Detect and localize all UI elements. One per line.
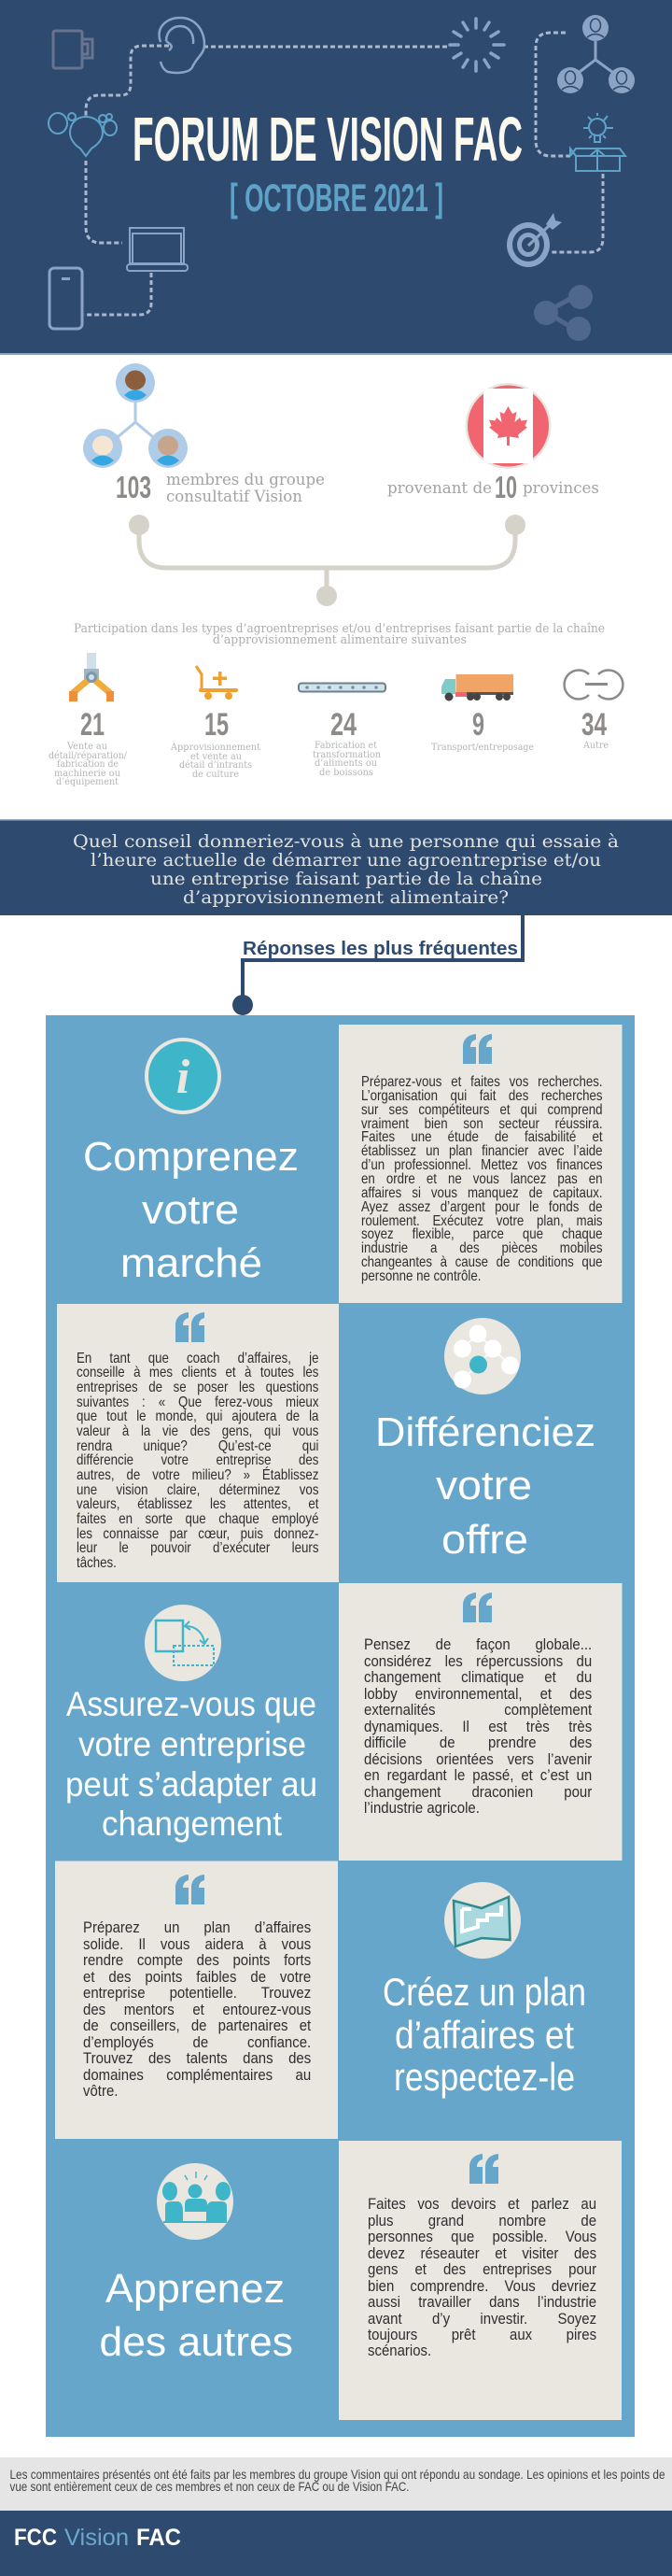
heading: marché	[120, 1240, 262, 1286]
icon: ear	[160, 18, 204, 73]
quote text: plus grand nombre de	[368, 2212, 596, 2229]
quote card	[339, 2141, 622, 2420]
quote text: vôtre.	[83, 2082, 118, 2100]
quote text: dynamiques. Il est très très	[364, 1718, 592, 1735]
icon: conveyor	[299, 684, 385, 691]
quote text: considérez les répercussions du	[364, 1652, 592, 1670]
quote text: entreprise potentielle. Trouvez	[83, 1984, 311, 2002]
icon: info	[147, 1040, 219, 1112]
heading: Apprenez	[105, 2266, 285, 2312]
quote text: avant d’y investir. Soyez	[368, 2310, 596, 2328]
icon: quote mark	[175, 1312, 204, 1342]
quote text	[364, 1636, 623, 1823]
category: machinery	[49, 653, 128, 787]
heading	[83, 1134, 299, 1286]
label: détail d’intrants	[179, 760, 252, 771]
provinces label: provenant de	[387, 479, 492, 498]
quote text: rendre compte des points forts	[83, 1951, 311, 1969]
quote text: externalités complètement	[364, 1701, 592, 1719]
quote text: scénarios.	[368, 2342, 431, 2359]
label: détail/réparation/	[49, 751, 128, 761]
icon: quote mark	[175, 1875, 204, 1904]
dashed connector paths	[84, 33, 603, 315]
quote text: toujours prêt aux pires	[368, 2326, 596, 2343]
question text: Quel conseil donneriez-vous à une personne qui essaie à	[73, 831, 619, 852]
quote text: conseille à mes clients et à toutes les	[77, 1365, 318, 1380]
number 9: 9	[472, 707, 484, 743]
heading: Assurez-vous que	[66, 1685, 316, 1723]
heading: changement	[102, 1805, 283, 1843]
quote text: changeantes à cause de conditions que	[360, 1254, 602, 1270]
question text	[73, 831, 619, 908]
label: de culture	[192, 770, 239, 780]
members label: consultatif Vision	[166, 488, 302, 506]
icon: canadian flag	[465, 383, 551, 469]
label: fabrication de	[57, 759, 119, 770]
quote text: gens et des entreprises pour	[368, 2260, 596, 2278]
quote text: domaines complémentaires au	[83, 2066, 311, 2084]
quote text: sur ses compétiteurs et qui comprend	[360, 1102, 602, 1118]
answer 5: learn from others	[99, 2141, 628, 2420]
members label: membres du groupe	[166, 471, 325, 489]
label	[49, 742, 128, 787]
label: d’aliments ou	[315, 758, 378, 769]
quote text: autres, de votre milieu? » Établissez	[77, 1467, 318, 1483]
quote text	[83, 1919, 343, 2106]
heading: Différenciez	[375, 1409, 595, 1455]
icon: loader	[450, 19, 504, 71]
label	[313, 741, 382, 778]
participation heading	[74, 622, 605, 647]
heading: Comprenez	[83, 1134, 299, 1180]
quote text: que tout le monde, qui ajoutera de la	[77, 1408, 318, 1424]
quote text: l’industrie agricole.	[364, 1799, 480, 1817]
answer 2: differentiate offer	[57, 1304, 595, 1582]
quote text: des mentors et entourez-vous	[83, 2001, 311, 2018]
quote text: industrie a des pièces mobiles	[360, 1240, 602, 1256]
answer 3: adapt to change	[65, 1583, 623, 1861]
disclaimer: vue sont entièrement ceux de ces membres et non ceux de FAC ou de Vision FAC.	[9, 2479, 409, 2494]
icon: mug	[53, 31, 92, 68]
quote text: décisions orientées vers l’avenir	[364, 1750, 592, 1768]
icon: target	[507, 213, 562, 267]
panel: members stat	[83, 363, 325, 506]
label: de boissons	[319, 768, 373, 778]
number 34: 34	[581, 707, 607, 743]
quote text: L’organisation qui fait des recherches	[360, 1088, 602, 1104]
heading: offre	[441, 1517, 528, 1563]
heading: top answers: Réponses les plus fréquentes	[243, 939, 518, 959]
number 21: 21	[80, 707, 105, 743]
icon: cart	[196, 666, 238, 700]
heading: Créez un plan	[383, 1970, 586, 2014]
quote card	[57, 1304, 339, 1582]
heading: d’affaires et	[395, 2013, 574, 2057]
label: machinerie ou	[54, 769, 121, 779]
label: transformation	[313, 750, 382, 760]
quote card	[339, 1025, 622, 1303]
heading	[375, 1409, 595, 1563]
footer	[0, 2511, 672, 2576]
quote text	[368, 2196, 628, 2369]
label: Fabrication et	[315, 741, 377, 751]
icon: speech bubbles	[49, 113, 117, 156]
quote text: Trouvez des talents dans des	[83, 2049, 311, 2067]
icon: differentiated dots	[444, 1318, 521, 1394]
quote text: une vision claire, déterminez vos	[77, 1482, 318, 1498]
icon: laptop	[127, 228, 188, 271]
quote text: personnes que possible. Vous	[368, 2228, 596, 2245]
quote text: établissez un plan financier avec l’aide	[360, 1143, 602, 1159]
icon: network of people	[557, 15, 635, 93]
quote text: changement climatique et du	[364, 1668, 592, 1686]
label: et vente au	[190, 752, 243, 762]
participation heading: Participation dans les types d’agroentreprises et/ou d’entreprises faisant partie de la chaîne	[74, 622, 605, 636]
number 103: 103	[116, 470, 151, 504]
icon: light bulb in box	[570, 113, 625, 171]
icon: three members	[83, 363, 188, 468]
answer 1: understand market	[83, 1025, 651, 1303]
bracket connector	[129, 515, 525, 606]
category: inputs	[170, 666, 260, 780]
provinces label: 10	[495, 470, 517, 504]
quote card	[55, 1861, 338, 2139]
heading	[99, 2266, 293, 2365]
icon: truck	[441, 674, 513, 701]
heading	[383, 1970, 586, 2099]
question text: une entreprise faisant partie de la chaîne	[150, 869, 542, 889]
provinces label	[387, 470, 599, 504]
question text: d’approvisionnement alimentaire?	[183, 887, 509, 908]
quote text: rendra unique? Qu’est-ce qui	[77, 1438, 318, 1454]
panel: provinces stat	[387, 383, 599, 504]
quote text: Ayez assez d’argent pour le fonds de	[360, 1199, 602, 1215]
quote text: En tant que coach d’affaires, je	[77, 1351, 318, 1366]
icon: quote mark	[469, 2154, 498, 2184]
quote text: suivantes : « Que ferez-vous mieux	[77, 1394, 318, 1410]
quote text: les connaisse par cœur, puis donnez-	[77, 1526, 318, 1542]
quote text: valeurs, établissez les attentes, et	[77, 1496, 318, 1512]
quote text: et des points faibles de votre	[83, 1968, 311, 1986]
heading: respectez-le	[394, 2055, 575, 2099]
label: Vente au	[66, 742, 108, 752]
quote text: Pensez de façon globale...	[364, 1635, 592, 1653]
icon: people meeting	[157, 2163, 233, 2240]
icon: phone	[49, 268, 82, 329]
subtitle: [ OCTOBRE 2021 ]	[230, 176, 443, 219]
quote text: bien comprendre. Vous devriez	[368, 2277, 596, 2295]
logo wordmark: Vision	[64, 2525, 129, 2551]
quote text: devez réseauter et visiter des	[368, 2244, 596, 2262]
heading: votre entreprise	[78, 1725, 306, 1763]
number 24: 24	[330, 707, 357, 743]
logo wordmark: FAC	[136, 2525, 181, 2551]
quote text: entreprises de se poser les questions	[77, 1380, 318, 1395]
label: Approvisionnement	[170, 743, 260, 753]
icon: quote mark	[463, 1592, 492, 1622]
connector: question to answers	[232, 915, 523, 1015]
quote text: Faites vos devoirs et parlez au	[368, 2195, 596, 2213]
quote text: Préparez-vous et faites vos recherches.	[360, 1074, 602, 1090]
answer 4: business plan	[55, 1861, 586, 2139]
category: transport	[431, 674, 534, 753]
number 15: 15	[204, 707, 229, 743]
icon: map	[444, 1882, 521, 1959]
quote text: leur le pouvoir d’exécuter leurs	[77, 1540, 318, 1556]
quote text: de conseillers, de partenaires et	[83, 2017, 311, 2034]
participation heading: d’approvisionnement alimentaire suivantes	[213, 633, 467, 647]
quote text: personne ne contrôle.	[360, 1268, 481, 1284]
quote text: lobby environnemental, et des	[364, 1685, 592, 1703]
quote text: aussi travailler dans l’industrie	[368, 2293, 596, 2311]
label: Transport/entreposage	[431, 743, 534, 753]
quote card	[339, 1583, 622, 1861]
members label	[166, 471, 325, 506]
quote text: différencie votre entreprise des	[77, 1452, 318, 1468]
panel: answers	[46, 1015, 651, 2437]
quote text	[77, 1352, 369, 1576]
quote text: solide. Il vous aidera à vous	[83, 1935, 311, 1953]
quote text: valeur à la vie des gens, qui vous	[77, 1423, 318, 1439]
provinces label: provinces	[523, 479, 599, 498]
icon: quote mark	[463, 1034, 492, 1064]
heading: votre	[436, 1463, 532, 1508]
header panel	[0, 0, 672, 355]
logo wordmark	[14, 2525, 181, 2551]
icon: info: i	[176, 1051, 190, 1104]
category: food processing	[299, 684, 385, 778]
icon: adapt	[145, 1605, 221, 1681]
heading: votre	[142, 1187, 239, 1233]
quote text: en ordre et ne vous lancez pas en	[360, 1171, 602, 1187]
label: d’équipement	[56, 777, 119, 787]
disclaimer	[0, 2457, 672, 2511]
quote text: Faites une étude de faisabilité et	[360, 1129, 602, 1145]
quote text: changement draconien pour	[364, 1783, 592, 1801]
quote text: difficile de prendre des	[364, 1734, 592, 1751]
heading: peut s’adapter au	[65, 1765, 317, 1804]
heading: des autres	[99, 2319, 293, 2365]
quote text: roulement. Exécutez votre plan, mais	[360, 1213, 602, 1229]
category: other	[565, 670, 623, 751]
icon: robotic claw	[69, 653, 114, 701]
quote text: faites en sorte que chaque employé	[77, 1511, 318, 1527]
heading	[65, 1685, 317, 1843]
quote text: vraiment bien son secteur réussira.	[360, 1116, 602, 1132]
quote text: soyez flexible, parce que chaque	[360, 1226, 602, 1242]
quote text	[360, 1076, 651, 1286]
icon: share	[534, 285, 593, 341]
quote text: d’un professionnel. Mettez vos finances	[360, 1157, 602, 1173]
logo wordmark: FCC	[14, 2525, 57, 2551]
quote text: Préparez un plan d’affaires	[83, 1918, 311, 1936]
question band	[0, 819, 672, 915]
quote text: en regardant le passé, et c’est un	[364, 1766, 592, 1784]
label	[170, 743, 260, 780]
quote text: tâches.	[77, 1555, 117, 1571]
question text: l’heure actuelle de démarrer une agroentreprise et/ou	[91, 850, 601, 870]
icon: chain link	[565, 670, 623, 699]
label: Autre	[582, 741, 609, 751]
quote text: d’employés de confiance.	[83, 2033, 311, 2051]
quote text: affaires si vous manquez de capitaux.	[360, 1185, 602, 1201]
